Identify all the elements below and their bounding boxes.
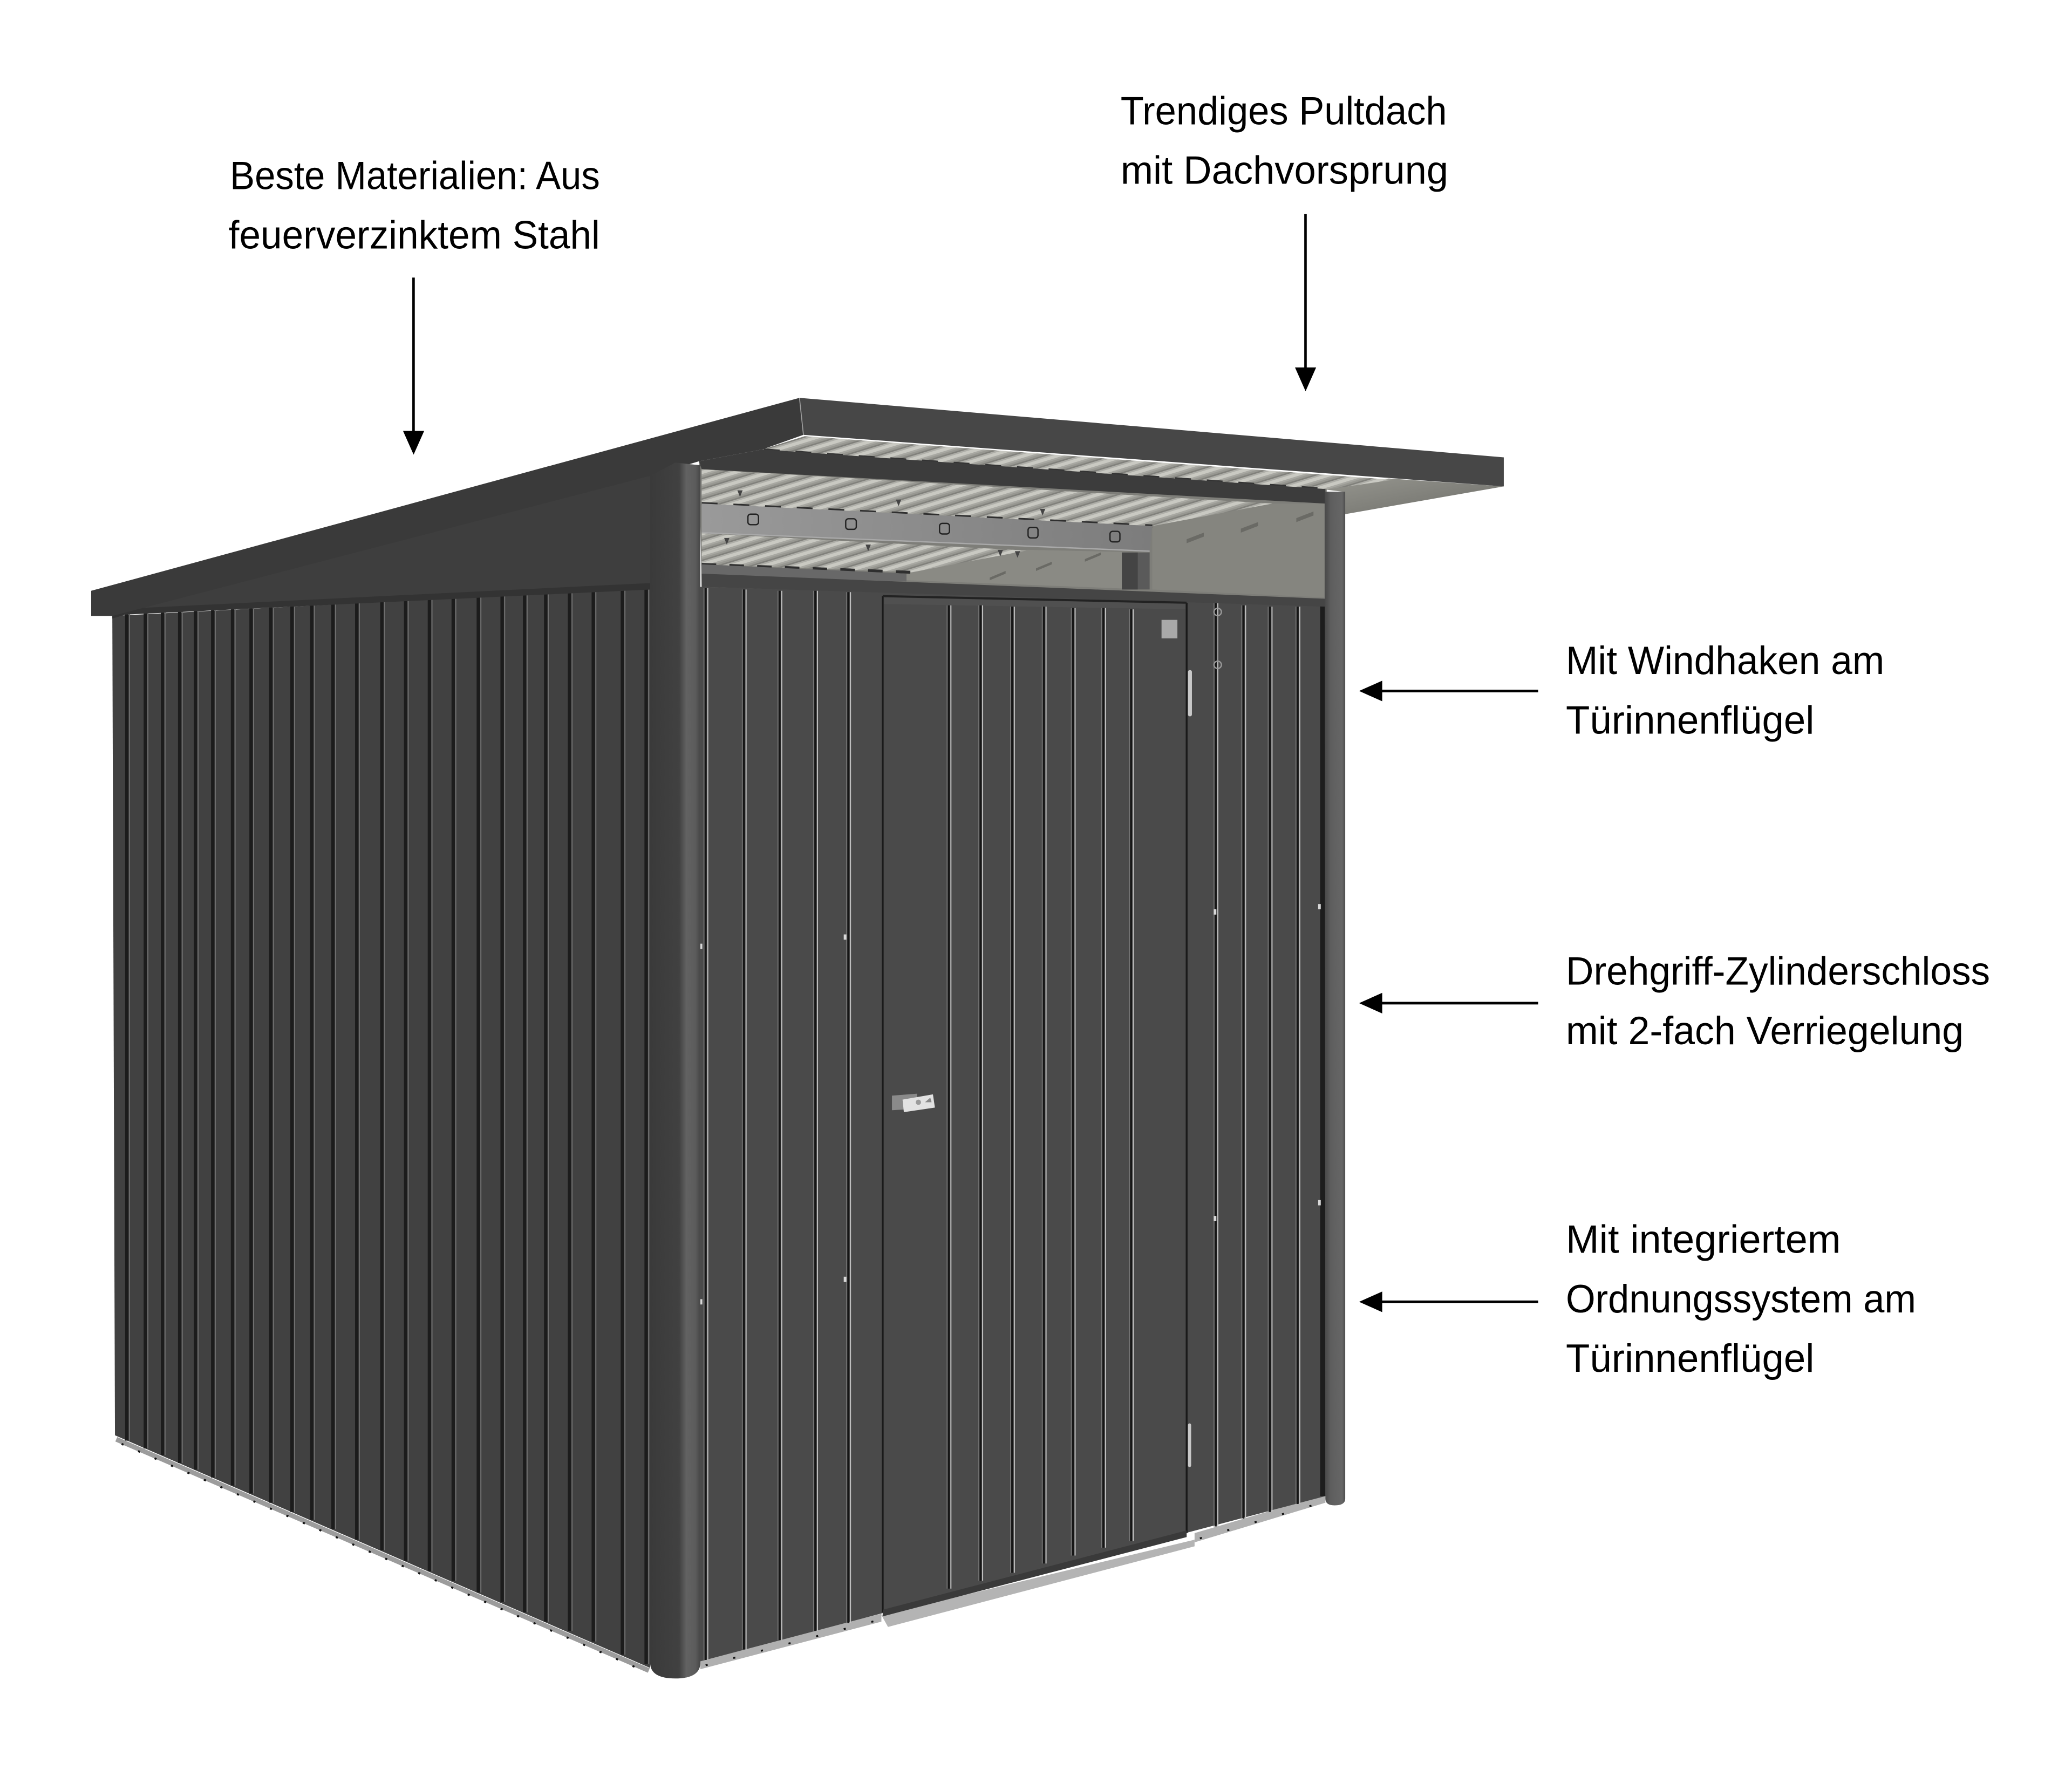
door	[883, 596, 1187, 1616]
panel: left side wall	[112, 582, 651, 1668]
roof: underside at overhang	[1321, 479, 1504, 514]
interior: right wall	[1153, 503, 1324, 597]
callout text: storage system: Türinnenflügel	[1566, 1336, 1814, 1380]
arrow: wind hook	[1359, 681, 1538, 702]
callout text: materials	[229, 153, 600, 257]
interior: screws	[724, 491, 1045, 558]
interior: opening backdrop	[699, 461, 1327, 603]
roof: side fascia	[91, 398, 803, 616]
lower door hinge	[1188, 1424, 1191, 1467]
interior: wall slots	[990, 512, 1313, 580]
door label plate	[1162, 620, 1177, 638]
arrow: materials to roof side	[403, 277, 424, 455]
base strip: front side	[700, 1495, 1325, 1669]
threshold	[881, 1540, 1195, 1627]
interior: lower lip	[701, 564, 906, 582]
base strip: left side	[117, 1439, 649, 1672]
corner post: front right	[1325, 492, 1345, 1505]
interior: rear wall	[906, 550, 1150, 589]
corner post: front left	[650, 462, 700, 1678]
callout text: storage system: Ordnungssystem am	[1566, 1276, 1916, 1321]
panel: gable triangle	[126, 471, 654, 611]
callout text: storage system: Mit integriertem	[1566, 1217, 1841, 1262]
arrow: roof overhang	[1295, 214, 1316, 391]
roof corner highlight	[800, 398, 803, 435]
front header band	[701, 574, 1325, 607]
upper door hinge	[1188, 670, 1192, 716]
door handle with cylinder lock	[892, 1094, 935, 1112]
callout text: mono-pitch roof: mit Dachvorsprung	[1121, 148, 1448, 193]
callout text: materials: Beste Materialien: Aus	[230, 153, 600, 198]
interior: corner post	[1122, 553, 1150, 589]
callout text: mono-pitch roof	[1121, 88, 1448, 193]
callout text: storage system	[1566, 1217, 1916, 1380]
illustration: garden shed	[91, 398, 1504, 1678]
roof: front beam	[699, 450, 1325, 503]
interior: rear corrugated sheet	[701, 533, 1027, 572]
arrow: storage system	[1359, 1291, 1538, 1312]
roof: front fascia	[800, 398, 1504, 486]
callout text: wind hook: Mit Windhaken am	[1566, 638, 1884, 683]
callout text: cylinder lock	[1566, 949, 1990, 1053]
callout text: cylinder lock: Drehgriff-Zylinderschloss	[1566, 949, 1990, 994]
callout text: wind hook	[1566, 638, 1884, 742]
interior: roof purlin with slots	[701, 503, 1153, 551]
arrow: cylinder lock	[1359, 993, 1538, 1013]
roof: corrugated strip under overhang	[762, 436, 1393, 491]
interior: corrugated roof sheet	[701, 469, 1272, 526]
callout text: materials: feuerverzinktem Stahl	[229, 212, 600, 257]
callout text: wind hook: Türinnenflügel	[1566, 697, 1814, 742]
callout text: cylinder lock: mit 2-fach Verriegelung	[1566, 1008, 1964, 1053]
panel: front wall	[700, 587, 1325, 1661]
fastener dots	[700, 904, 1321, 1304]
wind hook	[1214, 608, 1222, 669]
callout text: mono-pitch roof: Trendiges Pultdach	[1121, 88, 1447, 133]
